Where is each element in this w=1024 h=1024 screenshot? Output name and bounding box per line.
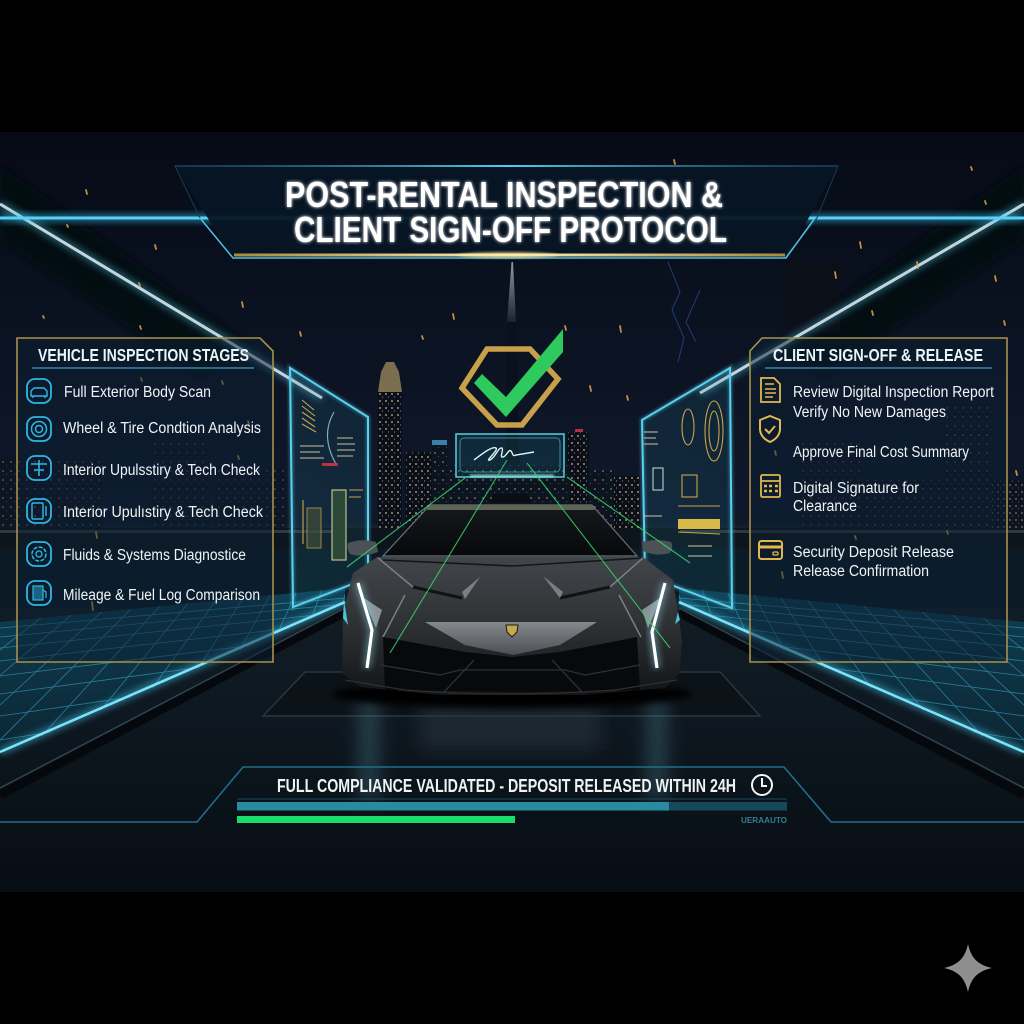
icon: document (761, 378, 780, 402)
title text (285, 174, 727, 250)
sign-off step 2: Approve Final Cost Summary (793, 444, 969, 461)
hood creases (378, 558, 643, 637)
lower grille (383, 637, 640, 692)
sign-off step 4: Release Confirmation (793, 563, 929, 580)
glowing grid floors (0, 588, 1024, 754)
floor reflections (360, 695, 666, 800)
holographic panel: left (290, 368, 368, 607)
black band: bottom (0, 892, 1024, 1024)
panel: vehicle inspection stages (17, 338, 273, 662)
sign-off step 4: Security Deposit Release (793, 544, 954, 561)
inspection laser lines (347, 460, 690, 653)
sign-off step 3: Clearance (793, 498, 857, 515)
stage 3 (27, 456, 260, 480)
stage 4: Interior Upulıstiry & Tech Check (63, 504, 263, 521)
heading: client sign-off and release: CLIENT SIGN-OFF & RELEASE (773, 345, 983, 365)
icon: shield check (760, 416, 780, 442)
icon: approval check badge (462, 329, 563, 425)
car body (342, 557, 682, 695)
stage 1: Full Exterior Body Scan (64, 384, 211, 401)
sign-off step 4 (793, 544, 954, 580)
stage 3: Interior Upulsstiry & Tech Check (63, 462, 260, 479)
road edges and neon strips (0, 602, 1024, 795)
background scene (0, 132, 1024, 892)
icon: calculator (761, 475, 780, 497)
bright rail lines (0, 204, 1024, 398)
icon: sparkle watermark (944, 944, 992, 992)
black band: top (0, 0, 1024, 132)
sign-off step 1: Review Digital Inspection Report (793, 384, 995, 401)
brand label: UERAAUTO (741, 815, 787, 825)
roof and windshield (383, 505, 637, 556)
stage 2 (27, 417, 261, 441)
heading: vehicle inspection stages: VEHICLE INSPECTION STAGES (38, 345, 249, 365)
city skyline (0, 262, 1024, 532)
badge (506, 625, 518, 637)
floating sparks (43, 160, 1017, 610)
stage 2: Wheel & Tire Condtion Analysis (63, 420, 261, 437)
sign-off step 1 (793, 384, 995, 421)
sign-off step 1: Verify No New Damages (793, 404, 946, 421)
car shadow (332, 680, 692, 708)
icon: payment card (759, 541, 782, 559)
headlights (343, 583, 680, 668)
sports car (332, 460, 692, 708)
dark rail beams (0, 165, 250, 375)
stage 5 (27, 542, 246, 566)
inspection platform (263, 672, 760, 716)
panel: client sign-off and release (750, 338, 1007, 662)
stage 1 (27, 379, 211, 403)
rooftop barrier (0, 528, 1024, 550)
digital signature box (456, 434, 564, 478)
sign-off step 3 (793, 480, 919, 515)
hood vents (462, 576, 563, 599)
progress bar: teal (237, 802, 787, 810)
stage 6 (27, 581, 260, 605)
compliance status bar (0, 767, 1024, 825)
icon: clock (752, 775, 772, 795)
stage 5: Fluids & Systems Diagnostice (63, 547, 246, 564)
progress bar: green (237, 816, 515, 823)
stage 4 (27, 499, 263, 523)
title text: POST-RENTAL INSPECTION & (285, 174, 723, 215)
title text: CLIENT SIGN-OFF PROTOCOL (294, 209, 727, 250)
holographic panel: right (642, 368, 732, 608)
side mirrors (347, 540, 672, 556)
hood highlight (425, 622, 597, 655)
status text: FULL COMPLIANCE VALIDATED - DEPOSIT RELEASED WITHIN 24H (277, 775, 736, 796)
stage 6: Mileage & Fuel Log Comparison (63, 587, 260, 604)
sign-off step 3: Digital Signature for (793, 480, 919, 497)
title banner (175, 165, 838, 258)
